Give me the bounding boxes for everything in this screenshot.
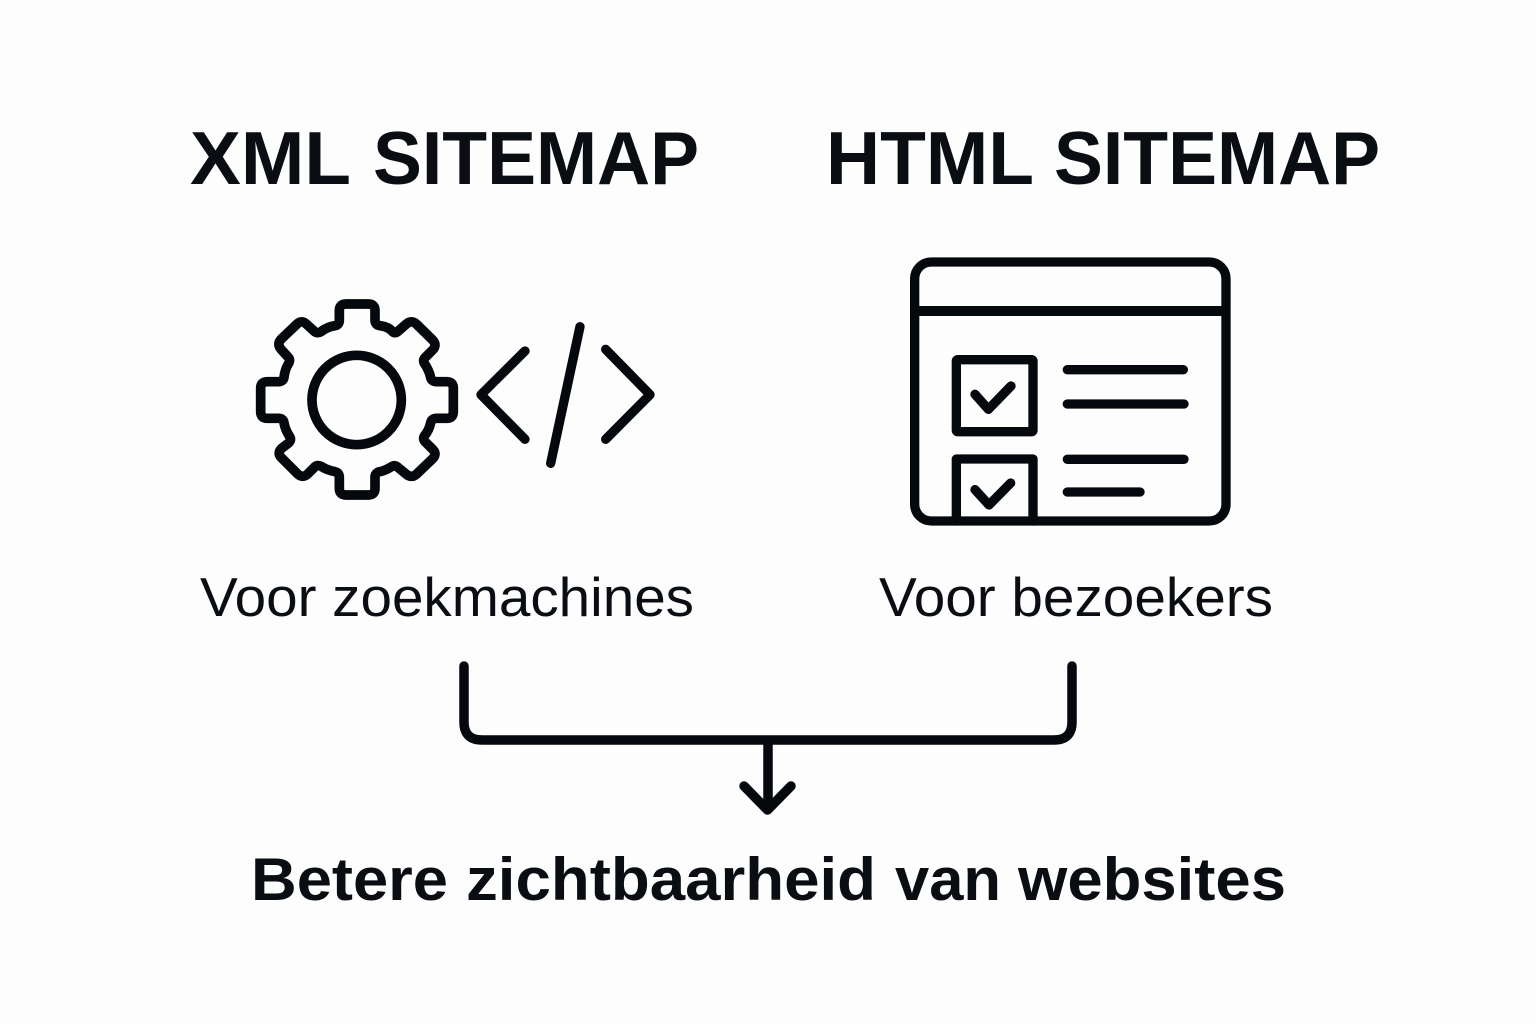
text: result statement: zichtbaarheid bbox=[466, 846, 876, 913]
text: result statement: websites bbox=[1017, 846, 1286, 913]
arrow: bracket joining both columns bbox=[464, 666, 1072, 740]
icon: code brackets bbox=[481, 327, 650, 463]
icon: gear bbox=[261, 304, 453, 495]
heading: HTML sitemap: HTML bbox=[826, 116, 1034, 200]
text: result statement: van bbox=[895, 846, 1001, 913]
heading: HTML sitemap bbox=[826, 116, 1380, 200]
heading: HTML sitemap: SITEMAP bbox=[1054, 116, 1380, 200]
heading: XML sitemap: SITEMAP bbox=[373, 116, 699, 200]
icon: browser window with checklist bbox=[915, 262, 1226, 521]
arrow: pointing down to result bbox=[744, 740, 791, 810]
text: for visitors: Voor bezoekers bbox=[879, 566, 1273, 628]
heading: XML sitemap: XML bbox=[190, 116, 351, 200]
text: for search engines: Voor zoekmachines bbox=[200, 566, 694, 628]
text: result statement: Betere bbox=[251, 846, 448, 913]
text: result statement bbox=[251, 846, 1286, 913]
icon: gear with code brackets bbox=[261, 304, 650, 495]
heading: XML sitemap bbox=[190, 116, 699, 200]
